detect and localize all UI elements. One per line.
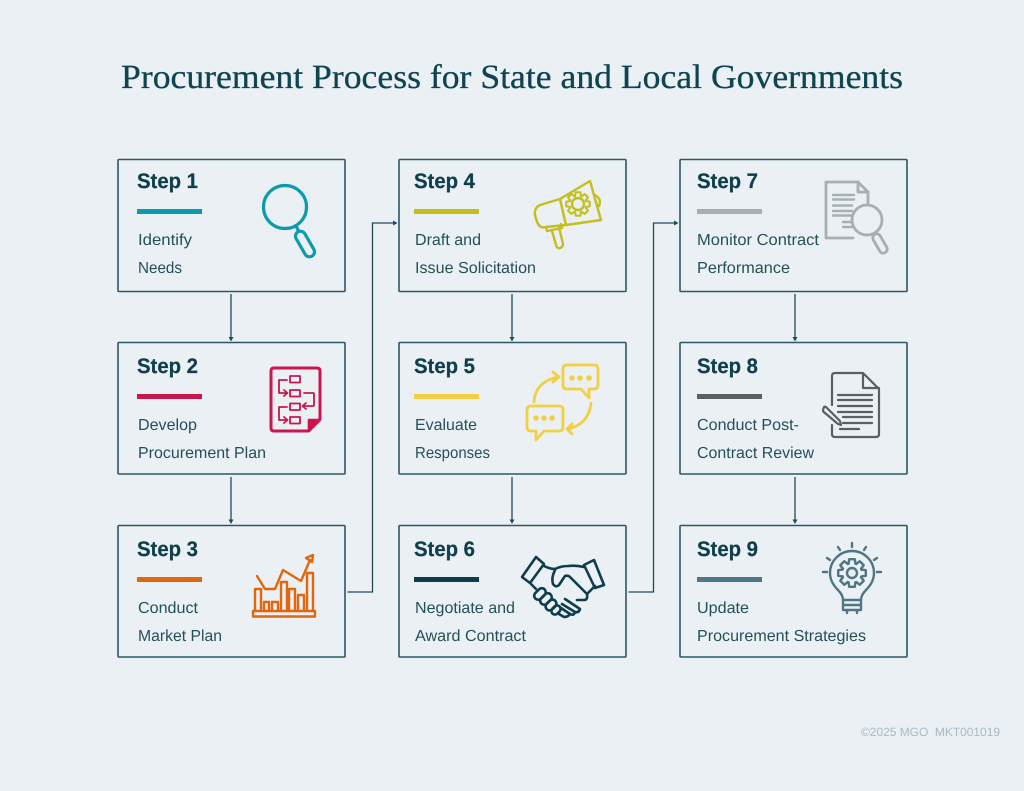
panel: step 1: Identify <box>138 232 192 249</box>
panel: step 8: Contract Review <box>697 445 814 462</box>
panel: step 2: Step 2 <box>137 355 198 378</box>
arrow: step 3 to step 4 <box>348 220 398 592</box>
panel: step 7 <box>680 160 907 292</box>
panel: step 7: Performance <box>697 260 790 277</box>
panel: step 8: Step 8 <box>697 355 758 378</box>
panel: step 6: Award Contract <box>415 628 527 645</box>
icon: megaphone with gear <box>535 181 601 248</box>
panel: step 9: Update <box>697 600 749 617</box>
panel: step 2 <box>118 342 345 474</box>
panel: step 8 <box>680 342 907 474</box>
arrow: step 5 to step 6 <box>510 477 514 524</box>
panel: step 6 <box>399 526 626 657</box>
panel: step 2: Procurement Plan <box>138 445 266 462</box>
panel: step 1: Step 1 <box>137 170 198 193</box>
panel: step 4 <box>399 160 626 292</box>
icon: handshake <box>522 557 604 617</box>
arrow: step 1 to step 2 <box>228 294 234 342</box>
icon: light bulb with gear <box>823 543 881 613</box>
panel: step 3: Market Plan <box>138 628 222 645</box>
icon: speech bubbles exchange <box>527 365 598 440</box>
icon: document with pen <box>823 373 879 437</box>
panel: step 4: Draft and <box>415 232 481 249</box>
panel: step 9: Step 9 <box>697 538 758 561</box>
panel: step 6: Negotiate and <box>415 600 515 617</box>
icon: magnifying glass <box>264 186 316 259</box>
arrow: step 2 to step 3 <box>228 477 234 524</box>
panel: step 4: Step 4 <box>414 170 475 193</box>
panel: step 3: Step 3 <box>137 538 198 561</box>
panel: step 5: Step 5 <box>414 355 475 378</box>
panel: step 9 <box>680 526 907 657</box>
panel: step 4: Issue Solicitation <box>415 260 536 277</box>
panel: step 7: Monitor Contract <box>697 232 820 249</box>
panel: step 8: Conduct Post- <box>697 417 799 434</box>
icon: bar chart <box>253 555 315 616</box>
panel: step 1 <box>118 160 345 292</box>
panel: step 5 <box>399 342 626 474</box>
panel: step 6: Step 6 <box>414 538 475 561</box>
panel: step 2: Develop <box>138 417 197 434</box>
panel: step 3: Conduct <box>138 600 199 617</box>
title: Procurement Process for State and Local Governments <box>121 59 903 96</box>
icon: document with magnifier <box>826 182 889 255</box>
panel: step 5: Evaluate <box>415 417 477 434</box>
icon: flowchart document <box>271 368 320 431</box>
panel: step 9: Procurement Strategies <box>697 628 866 645</box>
arrow: step 4 to step 5 <box>510 294 514 342</box>
panel: step 3 <box>118 526 345 657</box>
copyright footer: ©2025 MGO MKT001019 <box>861 725 1000 739</box>
panel: step 5: Responses <box>415 445 490 462</box>
panel: step 7: Step 7 <box>697 170 758 193</box>
arrow: step 8 to step 9 <box>792 477 798 524</box>
panel: step 1: Needs <box>138 260 182 277</box>
arrow: step 7 to step 8 <box>792 294 798 342</box>
arrow: step 6 to step 7 <box>628 220 678 592</box>
